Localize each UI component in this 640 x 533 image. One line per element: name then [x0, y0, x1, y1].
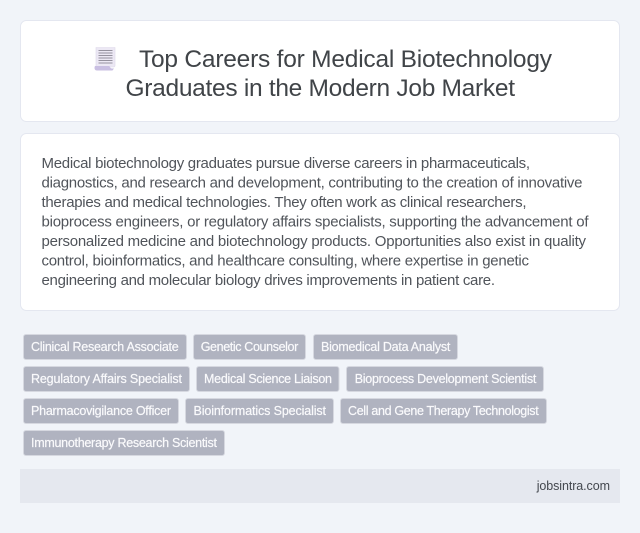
tag: Cell and Gene Therapy Technologist — [340, 398, 546, 424]
footer bar — [20, 469, 620, 503]
tag: Regulatory Affairs Specialist — [24, 366, 190, 392]
description text — [42, 155, 589, 289]
title text — [126, 46, 553, 102]
title text: Graduates in the Modern Job Market — [126, 75, 515, 102]
tag: Cell and Gene Therapy Technologist: Cell and Gene Therapy Technologist — [348, 404, 539, 418]
tag: Biomedical Data Analyst — [314, 334, 458, 360]
tag: Bioinformatics Specialist — [186, 398, 334, 424]
description text: Medical biotechnology graduates pursue diverse careers in pharmaceuticals, — [42, 155, 530, 172]
tag: Genetic Counselor — [194, 334, 306, 360]
career tags — [24, 334, 546, 456]
panel: title card — [20, 20, 620, 122]
tag: Pharmacovigilance Officer — [24, 398, 178, 424]
panel: description card — [20, 134, 620, 310]
description text: control, bioinformatics, and healthcare consulting, where expertise in genetic — [42, 252, 530, 270]
tag: Biomedical Data Analyst: Biomedical Data Analyst — [321, 340, 451, 354]
footer source text: jobsintra.com — [536, 479, 610, 493]
tag: Bioprocess Development Scientist: Bioprocess Development Scientist — [355, 372, 537, 386]
tag: Pharmacovigilance Officer: Pharmacovigilance Officer — [31, 404, 171, 418]
tag: Clinical Research Associate: Clinical Research Associate — [31, 340, 179, 354]
tag: Medical Science Liaison — [196, 366, 339, 392]
description text: engineering and molecular biology drives improvements in patient care. — [42, 272, 495, 289]
tag: Regulatory Affairs Specialist: Regulatory Affairs Specialist — [31, 372, 183, 386]
description text: therapies and medical technologies. They often work as clinical researchers, — [42, 194, 526, 211]
tag: Bioinformatics Specialist: Bioinformatics Specialist — [194, 404, 327, 418]
tag: Clinical Research Associate — [24, 334, 186, 360]
description text: diagnostics, and research and development, contributing to the creation of innovative — [42, 174, 582, 192]
tag: Bioprocess Development Scientist — [346, 366, 544, 392]
description text: bioprocess engineers, or regulatory affairs specialists, supporting the advancement of — [42, 214, 589, 230]
title text: Top Careers for Medical Biotechnology — [139, 46, 553, 73]
tag: Immunotherapy Research Scientist — [24, 430, 224, 456]
tag: Immunotherapy Research Scientist: Immunotherapy Research Scientist — [31, 436, 218, 450]
tag: Genetic Counselor: Genetic Counselor — [201, 340, 298, 354]
description text: personalized medicine and biotechnology products. Opportunities also exist in quality — [42, 233, 586, 250]
icon: document scroll — [95, 48, 115, 70]
tag: Medical Science Liaison: Medical Science Liaison — [204, 372, 332, 386]
